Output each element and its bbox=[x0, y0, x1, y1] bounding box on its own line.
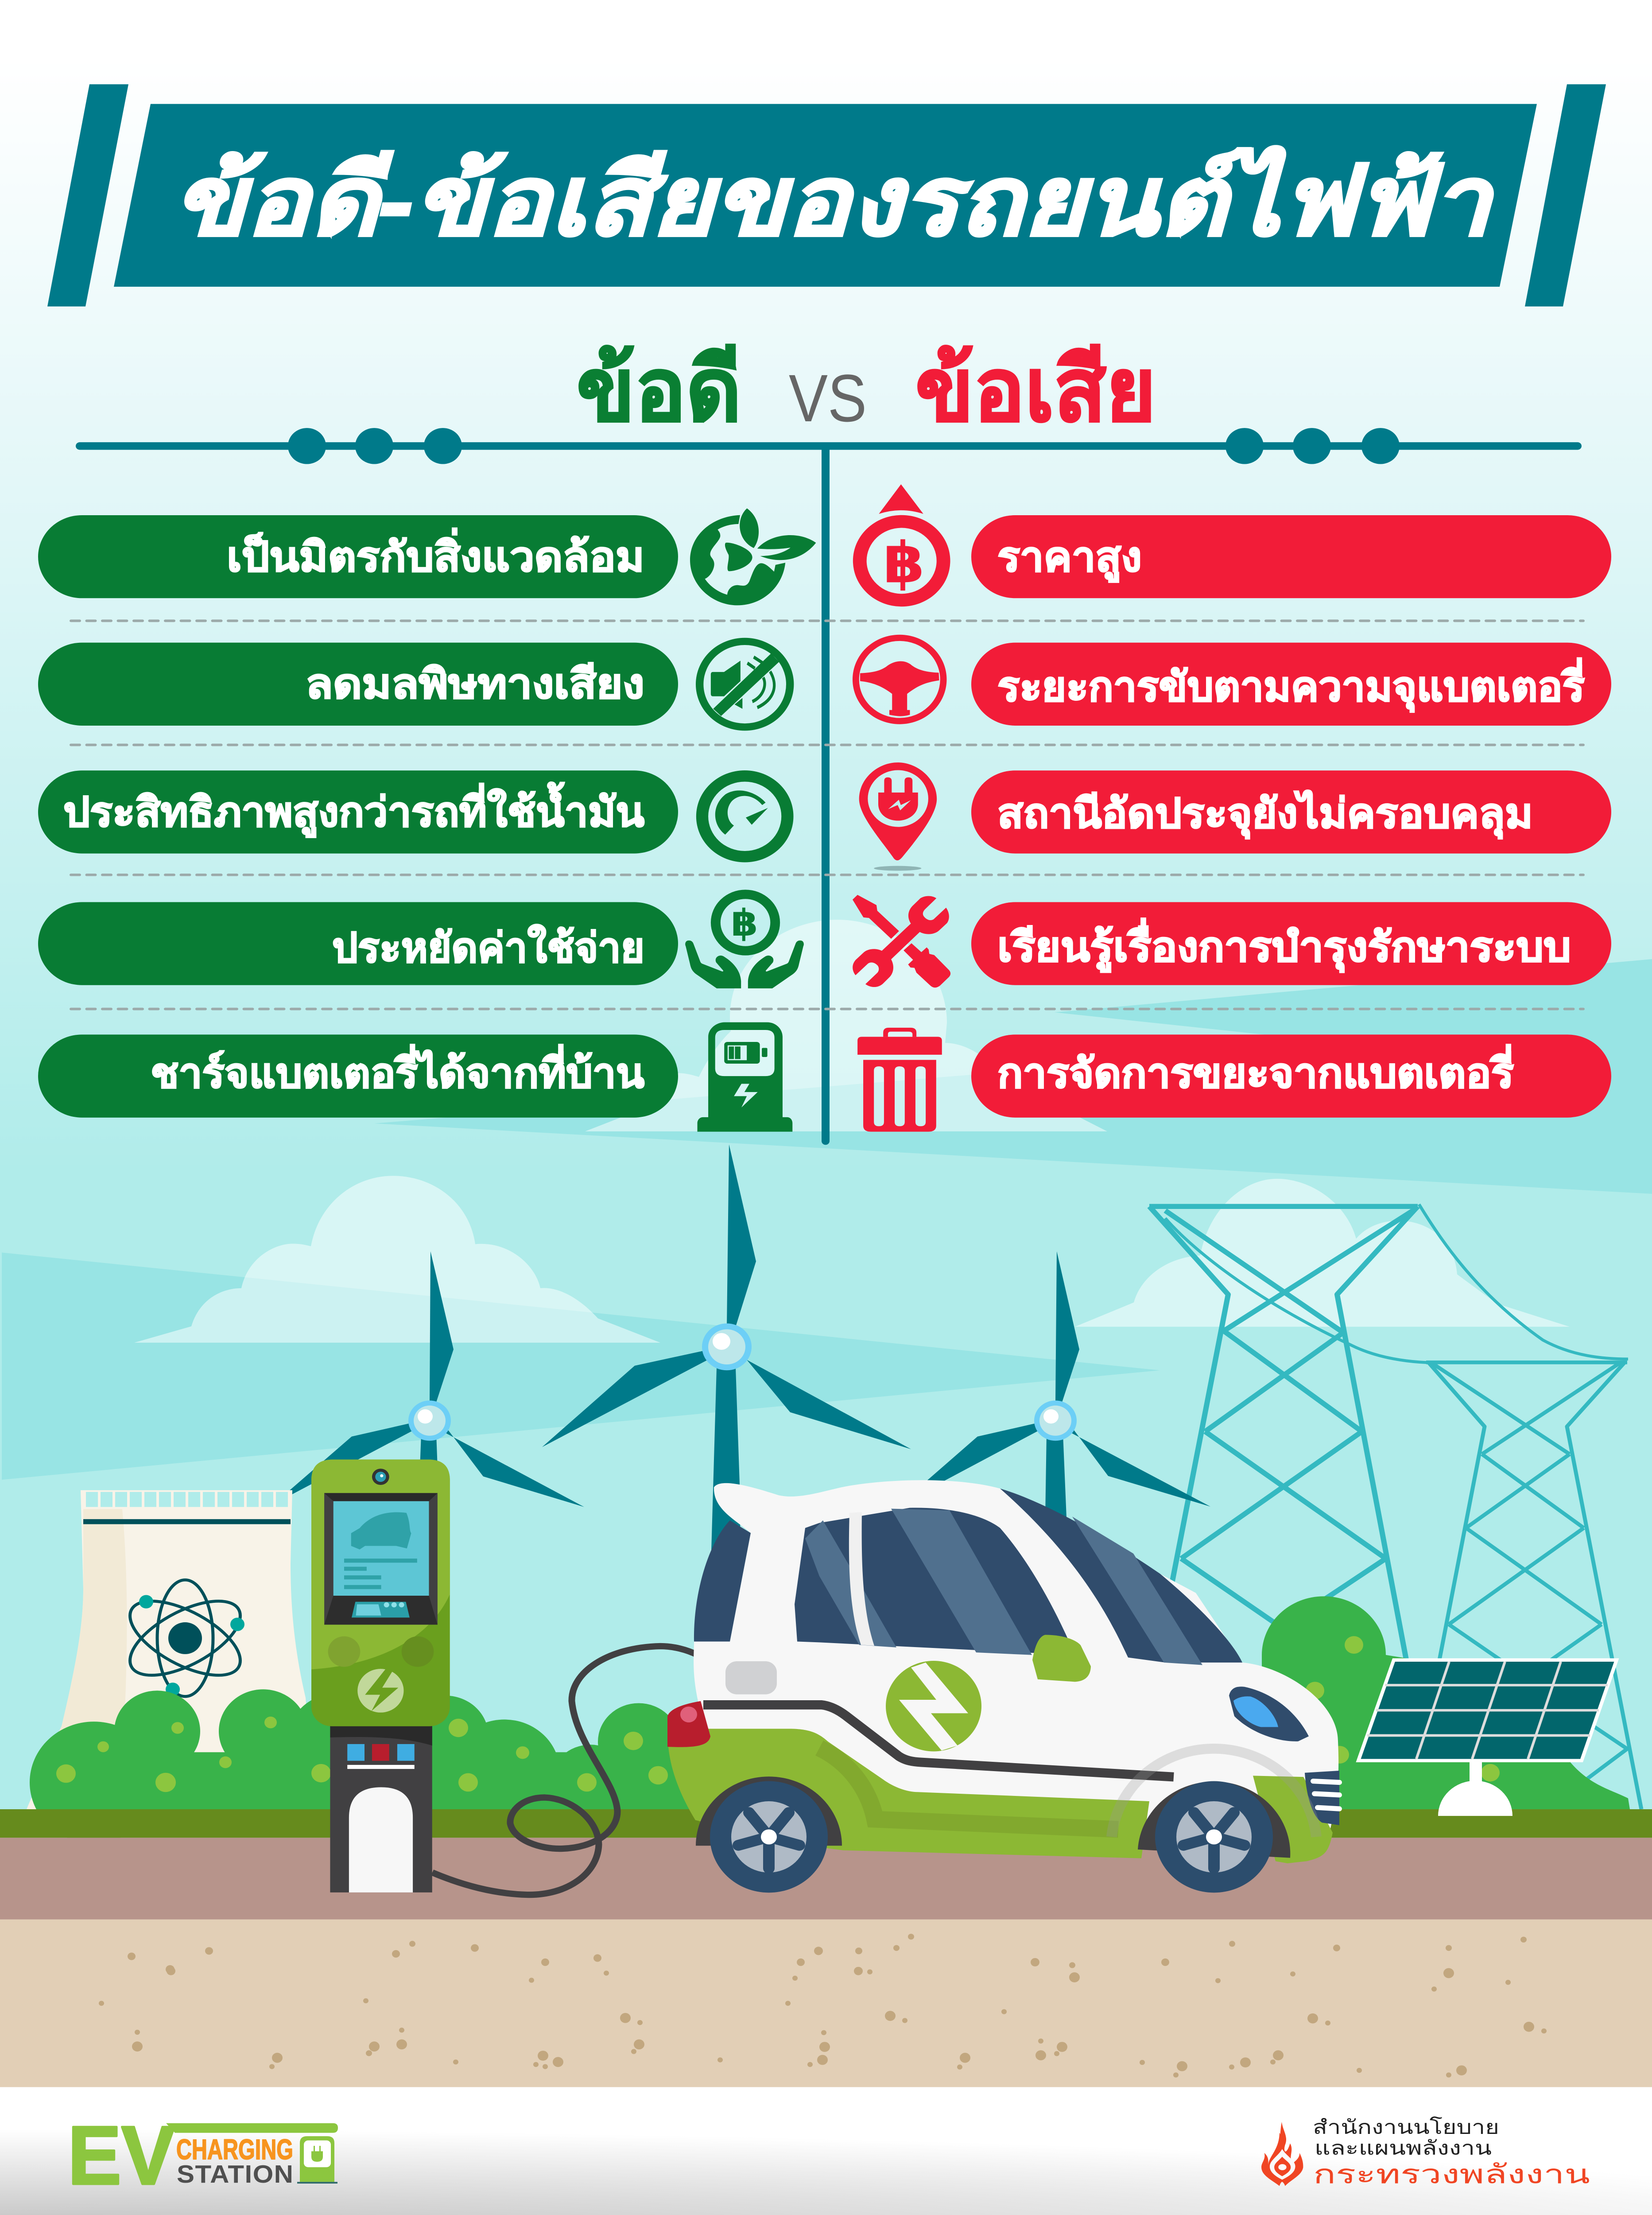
grass strip bbox=[0, 1809, 1652, 1838]
wind turbine left bbox=[274, 1251, 584, 1507]
icon: flame bbox=[1261, 2122, 1303, 2186]
power tower large bbox=[1149, 1205, 1628, 1664]
grille bbox=[1305, 1771, 1339, 1825]
row separators bbox=[71, 621, 1583, 1009]
versus heading: ข้อเสีย bbox=[915, 341, 1156, 439]
pill: home charging: ชาร์จแบตเตอรี่ได้จากที่บ้าน bbox=[151, 1044, 644, 1096]
pill: price: ราคาสูง bbox=[997, 534, 1142, 583]
cable bbox=[432, 1646, 698, 1895]
pill: range bbox=[971, 643, 1611, 726]
wheel arch highlight bbox=[1112, 1749, 1316, 1837]
bush right bbox=[1262, 1596, 1630, 1809]
power tower small bbox=[1426, 1361, 1641, 1809]
icon: gauge bbox=[696, 770, 793, 863]
pill: waste bbox=[971, 1034, 1611, 1118]
icon: no noise bbox=[696, 638, 794, 731]
pill: maintenance: เรียนรู้เรื่องการบำรุงรักษาระบบ bbox=[997, 918, 1571, 973]
pill: stations: สถานีอัดประจุยังไม่ครอบคลุม bbox=[997, 790, 1533, 839]
icon: coin in hands: ฿ bbox=[731, 902, 758, 944]
sand ground bbox=[0, 1920, 1652, 2087]
icon: steering wheel bbox=[853, 635, 946, 724]
icon: tools bbox=[853, 895, 950, 987]
divider with dots bbox=[76, 428, 1582, 1145]
title banner bbox=[47, 84, 1606, 307]
side window bbox=[795, 1508, 1075, 1655]
footer background bbox=[0, 2087, 1652, 2215]
door logo bbox=[886, 1661, 981, 1751]
pill: noise: ลดมลพิษทางเสียง bbox=[306, 661, 644, 707]
pill: waste: การจัดการขยะจากแบตเตอรี่ bbox=[997, 1044, 1514, 1096]
icon: coin in hands bbox=[685, 890, 804, 988]
charging station bbox=[311, 1460, 450, 1892]
windshield bbox=[1000, 1488, 1242, 1665]
pill: saving: ประหยัดค่าใช้จ่าย bbox=[332, 925, 644, 971]
lower body green bbox=[668, 1729, 1149, 1858]
wind turbine right bbox=[899, 1251, 1210, 1517]
pill: efficiency bbox=[38, 770, 678, 854]
title: ข้อดี-ข้อเสียของรถยนต์ไฟฟ้า bbox=[173, 146, 1494, 255]
pill: environment bbox=[38, 515, 678, 598]
panel: disadvantages bbox=[971, 515, 1611, 1118]
logo: ministry of energy bbox=[1261, 2116, 1590, 2189]
logo: ministry of energy: สำนักงานนโยบาย bbox=[1313, 2116, 1499, 2138]
electric car bbox=[667, 1480, 1339, 1892]
rear plate bbox=[725, 1661, 777, 1694]
bushes behind charger bbox=[30, 1689, 709, 1843]
pill: price bbox=[971, 515, 1611, 598]
road bbox=[0, 1838, 1652, 1920]
pill: saving bbox=[38, 902, 678, 985]
versus heading: ข้อดี bbox=[577, 341, 741, 439]
logo: EV charging station: CHARGING bbox=[176, 2134, 293, 2166]
middle sky band bbox=[2, 1252, 1160, 1480]
pill: noise bbox=[38, 643, 678, 726]
pill: range: ระยะการขับตามความจุแบตเตอรี่ bbox=[997, 658, 1585, 712]
icon: charging location pin bbox=[859, 762, 937, 871]
versus heading: VS bbox=[789, 361, 867, 436]
pill: maintenance bbox=[971, 902, 1611, 985]
panel: advantages bbox=[38, 515, 678, 1118]
side mirror bbox=[1032, 1635, 1091, 1682]
icon: charging station bbox=[698, 1022, 792, 1132]
front wheel bbox=[1138, 1781, 1290, 1892]
upper sky band bbox=[374, 959, 1652, 1194]
rear wheel bbox=[696, 1776, 842, 1892]
icon: trash bin bbox=[857, 1028, 942, 1132]
logo: EV charging station bbox=[68, 2109, 338, 2202]
station head bbox=[311, 1460, 450, 1726]
cloud left bbox=[134, 1176, 660, 1343]
rear window bbox=[694, 1520, 751, 1642]
solar panel bbox=[1358, 1660, 1617, 1816]
car body bbox=[694, 1480, 1338, 1853]
pill: efficiency: ประสิทธิภาพสูงกว่ารถที่ใช้น้ำมัน bbox=[63, 782, 644, 838]
front green bbox=[1253, 1776, 1333, 1863]
icon: rising price bbox=[853, 484, 950, 606]
logo: EV charging station: EV bbox=[68, 2109, 175, 2202]
icon: globe and leaves bbox=[690, 509, 816, 605]
cloud right bbox=[1075, 1179, 1570, 1327]
headlight bbox=[1229, 1687, 1309, 1741]
pill: stations bbox=[971, 770, 1611, 854]
versus heading bbox=[577, 341, 1156, 439]
cloud behind icons bbox=[585, 920, 1107, 1131]
tail light bbox=[667, 1701, 710, 1747]
body line bbox=[703, 1705, 1174, 1777]
station base bbox=[330, 1726, 432, 1892]
icon: rising price: ฿ bbox=[883, 531, 925, 595]
nuclear cooling tower bbox=[27, 1490, 314, 1809]
logo: ministry of energy: และแผนพลังงาน bbox=[1315, 2137, 1492, 2159]
lower body stripe bbox=[819, 1748, 1118, 1829]
logo: ministry of energy: กระทรวงพลังงาน bbox=[1313, 2160, 1590, 2189]
icon: atom bbox=[118, 1580, 252, 1696]
pill: environment: เป็นมิตรกับสิ่งแวดล้อม bbox=[227, 528, 644, 580]
pill: home charging bbox=[38, 1034, 678, 1118]
logo: EV charging station: STATION bbox=[177, 2161, 293, 2188]
wind turbine centre bbox=[542, 1144, 911, 1551]
